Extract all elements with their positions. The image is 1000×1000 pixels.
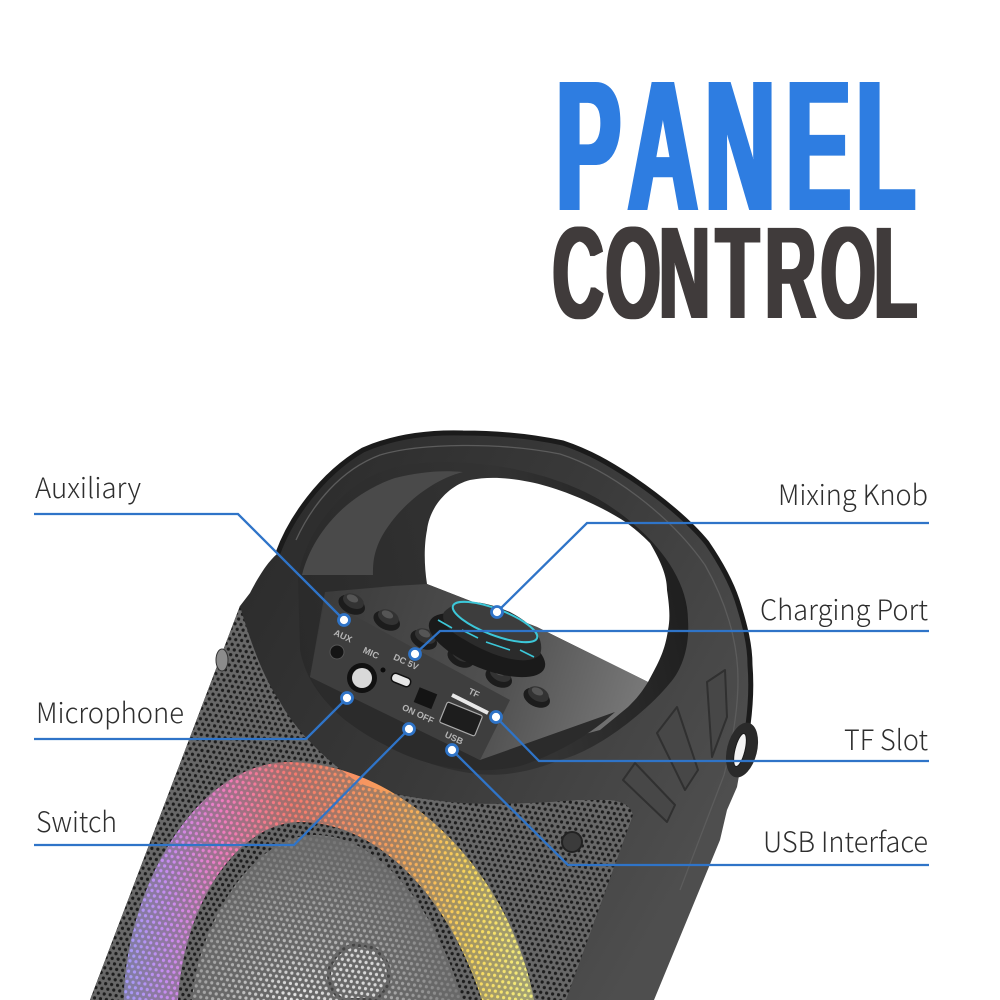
- USB port: [439, 702, 483, 747]
- callout: USB Interface: USB Interface: [763, 821, 928, 861]
- woofer cone: [192, 835, 462, 1000]
- callout: Charging Port: [410, 589, 929, 660]
- callout: TF Slot: [490, 712, 929, 761]
- perforated mesh: [90, 606, 633, 1000]
- callout: Microphone: Microphone: [36, 692, 184, 732]
- dust cap: [329, 945, 389, 1000]
- AUX jack: AUX: [332, 627, 354, 645]
- TF slot: TF: [467, 686, 482, 700]
- MIC jack: [347, 645, 386, 693]
- handle opening: [425, 478, 669, 682]
- top face of panel: [310, 584, 648, 762]
- callout: USB Interface: [446, 744, 929, 865]
- speaker body and handle: [90, 433, 751, 1000]
- small knobs: [335, 589, 554, 712]
- rainbow LED ring: [124, 762, 534, 1000]
- screw: right grille: [562, 832, 582, 852]
- body inset panels: [623, 670, 727, 822]
- recess behind control panel: [298, 462, 688, 775]
- TF slot: [452, 686, 488, 713]
- AUX jack: [330, 627, 354, 659]
- inner handle wedge: [302, 471, 463, 575]
- callout: Switch: Switch: [36, 801, 117, 841]
- ring glow through mesh: [124, 762, 534, 1000]
- MIC jack: MIC: [361, 645, 381, 661]
- title word: PANEL: PANEL: [556, 43, 915, 250]
- big mixing knob: [421, 594, 553, 690]
- on/off switch: ON OFF: [400, 702, 436, 726]
- strap loop: [721, 719, 763, 781]
- lower band: [310, 675, 615, 770]
- screw: left side: [216, 649, 228, 671]
- on/off switch: [400, 687, 437, 726]
- callout: Switch: [34, 724, 414, 845]
- DC 5V port: [390, 652, 420, 688]
- handle rim line: [296, 445, 738, 890]
- DC 5V port: DC 5V: [392, 652, 420, 672]
- speaker grille with light ring: [90, 606, 633, 1000]
- USB port: USB: [443, 729, 465, 747]
- title: [553, 43, 917, 347]
- callout: TF Slot: TF Slot: [844, 719, 928, 759]
- callout: Auxiliary: Auxiliary: [35, 467, 141, 507]
- callout: Mixing Knob: Mixing Knob: [778, 474, 928, 514]
- callout: Charging Port: Charging Port: [760, 589, 928, 629]
- title word: CONTROL: CONTROL: [553, 201, 917, 347]
- callout: Mixing Knob: [492, 474, 929, 618]
- callout: Auxiliary: [34, 467, 350, 626]
- grille back: [90, 606, 633, 1000]
- handle outer rim highlight: [278, 433, 751, 725]
- speaker illustration: [90, 433, 763, 1000]
- port plate: [310, 600, 510, 760]
- callout: Microphone: [34, 692, 352, 739]
